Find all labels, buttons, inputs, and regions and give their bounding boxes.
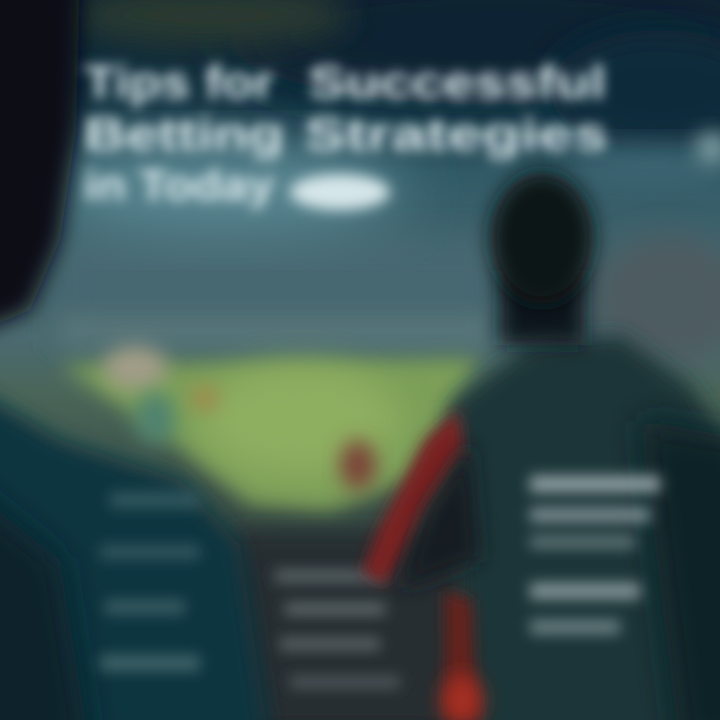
arm bbox=[400, 440, 480, 590]
title: in Today bbox=[84, 161, 275, 210]
title: Strategies bbox=[304, 108, 608, 160]
title: Betting bbox=[84, 108, 284, 160]
lower stands bbox=[230, 530, 460, 720]
shirt text block bbox=[530, 476, 660, 634]
stadium light glow bbox=[290, 174, 390, 210]
right foreground person bbox=[340, 172, 720, 720]
red sleeve bbox=[362, 410, 464, 585]
left foreground person bbox=[0, 0, 270, 720]
head bbox=[490, 172, 594, 304]
hand bbox=[340, 440, 376, 490]
neck bbox=[500, 270, 585, 345]
pitch bbox=[60, 346, 480, 512]
title bbox=[84, 56, 608, 210]
torso bbox=[450, 335, 720, 720]
title: Successful bbox=[308, 56, 606, 108]
title: Tips for bbox=[84, 56, 274, 108]
